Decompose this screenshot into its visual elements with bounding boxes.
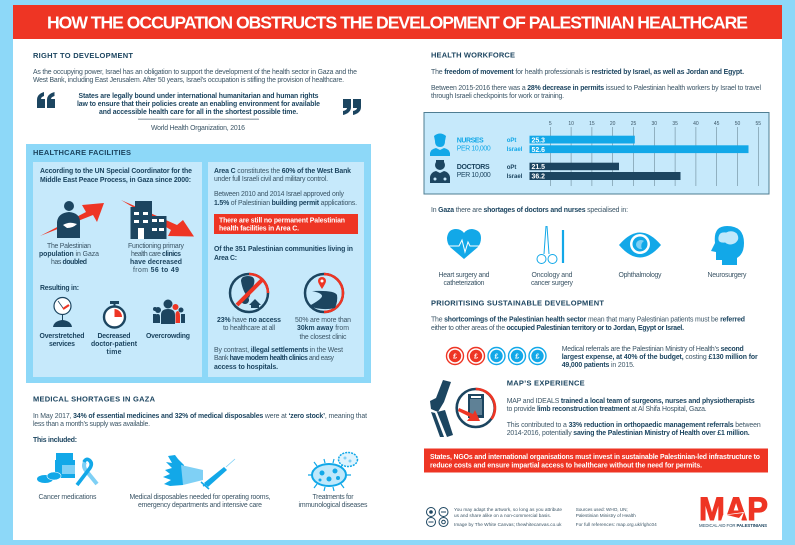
section: right to development: World Health Organization, 2016 bbox=[151, 125, 245, 132]
title banner: HOW THE OCCUPATION OBSTRUCTS THE DEVELOPMENT OF PALESTINIAN HEALTHCARE bbox=[47, 12, 748, 32]
icon: five pound coins, two red and three blue: £ bbox=[495, 354, 499, 360]
callout: call to action: reduce costs and ensure impartial access to healthcare without the need for permits. bbox=[430, 462, 702, 470]
icon: stopwatch bbox=[104, 301, 125, 328]
section: health workforce: The freedom of movement for health professionals is restricted by Israel, as well as Jordan and Egypt. bbox=[431, 69, 744, 76]
footer: licence and sources: us and share alike on a non-commercial basis. bbox=[454, 513, 551, 518]
bar chart: nurses and doctors per 10,000: Israel bbox=[507, 147, 523, 153]
icon: gloves and syringe bbox=[163, 455, 235, 489]
panel: healthcare facilities: have decreased bbox=[130, 259, 182, 266]
bar chart: nurses and doctors per 10,000: 30 bbox=[652, 121, 657, 127]
icon: five pound coins, two red and three blue bbox=[446, 348, 546, 364]
icon: five pound coins, two red and three blue: £ bbox=[536, 354, 540, 360]
footer: licence and sources: You may adapt the artwork, so long as you attribute bbox=[454, 507, 562, 512]
panel: healthcare facilities: Overcrowding bbox=[146, 333, 190, 340]
section: health workforce: HEALTH WORKFORCE bbox=[431, 50, 515, 60]
section: medical shortages in Gaza: Cancer medications bbox=[38, 494, 97, 501]
section: medical shortages in Gaza: This included: bbox=[33, 437, 77, 444]
section: right to development: States are legally bound under international humanitarian and human rights bbox=[78, 93, 319, 100]
icon: population arrow and person bbox=[40, 201, 104, 238]
callout: call to action bbox=[424, 448, 768, 472]
section: medical shortages in Gaza: less than a month’s supply was available. bbox=[33, 421, 150, 428]
panel: healthcare facilities: 1.5% of Palestinian building permit applications. bbox=[214, 200, 357, 207]
section: right to development: law to ensure that their policies create an enabling environment for available bbox=[77, 101, 320, 108]
section: right to development: As the occupying power, Israel has an obligation to support the development of the health sector in Gaza and the bbox=[33, 69, 357, 76]
panel: healthcare facilities: Area C constitutes the 60% of the West Bank bbox=[214, 168, 351, 175]
icon: pressure gauge bbox=[53, 298, 72, 327]
panel: healthcare facilities: By contrast, illegal settlements in the West bbox=[214, 347, 343, 354]
panel: healthcare facilities: According to the UN Special Coordinator for the bbox=[40, 168, 192, 175]
panel: healthcare facilities: Functioning primary bbox=[128, 243, 185, 250]
bar chart: nurses and doctors per 10,000: 15 bbox=[589, 121, 595, 127]
icon: nurse bbox=[430, 134, 450, 156]
section: health workforce: Between 2015-2016 there was a 28% decrease in permits issued to Palestinian health workers by Israel to travel bbox=[431, 85, 761, 92]
panel: healthcare facilities: has doubled bbox=[51, 259, 87, 266]
icon: crowd of people bbox=[153, 300, 185, 324]
bar chart: nurses and doctors per 10,000: 5 bbox=[549, 121, 552, 127]
section: medical shortages in Gaza: MEDICAL SHORTAGES IN GAZA bbox=[33, 394, 156, 404]
panel: healthcare facilities: to healthcare at all bbox=[223, 325, 275, 332]
section: medical shortages in Gaza: emergency departments and intensive care bbox=[138, 502, 262, 509]
section: medical shortages in Gaza bbox=[33, 394, 368, 509]
panel: healthcare facilities: Resulting in: bbox=[40, 285, 79, 292]
panel: healthcare facilities: Between 2010 and 2014 Israel approved only bbox=[214, 191, 345, 198]
panel: healthcare facilities: doctor-patient bbox=[91, 341, 138, 348]
panel: healthcare facilities: HEALTHCARE FACILITIES bbox=[33, 148, 131, 157]
panel: healthcare facilities: population in Gaza bbox=[39, 251, 99, 258]
section: prioritising sustainable development: The shortcomings of the Palestinian health sector mean that many Palestinian patients must be referred bbox=[431, 316, 745, 324]
icon: five pound coins, two red and three blue: £ bbox=[515, 354, 519, 360]
logo: Medical Aid for Palestinians: MEDICAL AID FOR PALESTINIANS bbox=[699, 523, 767, 528]
panel: healthcare facilities: 50% are more than bbox=[295, 317, 351, 324]
section: MAP's experience: MAP’S EXPERIENCE bbox=[507, 378, 585, 388]
section: prioritising sustainable development: largest expense, at 40% of the budget, costing £130 million for bbox=[562, 354, 758, 361]
section: medical shortages in Gaza: Medical disposables needed for operating rooms, bbox=[130, 494, 271, 501]
section: prioritising sustainable development: 49,000 patients in 2015. bbox=[562, 362, 635, 369]
icon: closing quote mark bbox=[343, 99, 361, 115]
section: prioritising sustainable development bbox=[431, 298, 758, 369]
icon: no access to healthcare bbox=[230, 274, 268, 312]
bars: nurses: 52.6 bbox=[532, 147, 545, 154]
icon: bacteria bbox=[308, 452, 358, 491]
icon: clipboard in circle bbox=[457, 389, 495, 427]
section: MAP's experience: to provide limb reconstruction treatment at Al Shifa Hospital, Gaza. bbox=[507, 406, 707, 413]
text: Ophthalmology bbox=[618, 272, 662, 279]
panel: healthcare facilities: 23% have no access bbox=[217, 317, 281, 324]
bar chart: nurses and doctors per 10,000: 35 bbox=[672, 121, 678, 127]
section: MAP's experience bbox=[507, 378, 761, 437]
footer: licence and sources: Sources used: WHO, UN; bbox=[576, 507, 628, 512]
icon: knee bones bbox=[430, 380, 453, 437]
footer: licence and sources: For full references: map.org.uk/rlghc04 bbox=[576, 522, 657, 527]
section: medical shortages in Gaza: Treatments for bbox=[312, 494, 354, 501]
text: cancer surgery bbox=[531, 280, 574, 287]
icon: eye bbox=[619, 232, 661, 258]
bar chart: nurses and doctors per 10,000: NURSES bbox=[457, 138, 484, 144]
bar chart: nurses and doctors per 10,000: oPt bbox=[507, 138, 516, 144]
section: health workforce: through Israeli checkpoints for work or training. bbox=[431, 93, 564, 100]
section: prioritising sustainable development: either to other areas of the occupied Palestinian territory or to Jordan, Egypt or Israel. bbox=[431, 325, 684, 332]
bars: doctors: 36.2 bbox=[532, 174, 545, 181]
panel: healthcare facilities: Area C: bbox=[214, 255, 237, 262]
panel: healthcare facilities: services bbox=[49, 341, 75, 348]
bar chart: nurses and doctors per 10,000: 55 bbox=[756, 121, 761, 127]
bar chart: nurses and doctors per 10,000: 25 bbox=[631, 121, 636, 127]
icon: doctor bbox=[430, 160, 450, 183]
section: right to development: West Bank, including East Jerusalem. After 50 years, Israel’s occupation is stifling the provision of healthcare. bbox=[33, 77, 344, 84]
section: right to development bbox=[33, 51, 361, 132]
bar chart: nurses and doctors per 10,000: PER 10,000 bbox=[457, 146, 491, 152]
icon: brain in head bbox=[711, 226, 744, 265]
text: In Gaza there are shortages of doctors and nurses specialised in: bbox=[431, 207, 628, 214]
footer: licence and sources: Palestinian Ministry of Health bbox=[576, 513, 636, 518]
bar chart: nurses and doctors per 10,000: DOCTORS bbox=[457, 164, 490, 171]
panel: healthcare facilities bbox=[26, 144, 371, 383]
icon: road to distant clinic bbox=[305, 274, 343, 312]
icon: clinic building and falling arrow bbox=[121, 200, 194, 239]
section: MAP's experience: 2014-2016, potentially saving the Palestinian Ministry of Health over £1 million. bbox=[507, 430, 750, 437]
bar chart: nurses and doctors per 10,000: 50 bbox=[735, 121, 740, 127]
icon: surgical instruments bbox=[537, 226, 563, 264]
icon: five pound coins, two red and three blue: £ bbox=[453, 354, 457, 360]
icon: heart bbox=[447, 229, 481, 259]
text: Oncology and bbox=[532, 272, 573, 279]
section: right to development: and accessible health care for all in the shortest possible time. bbox=[99, 109, 298, 116]
callout: no permanent facilities: health facilities in Area C. bbox=[219, 226, 299, 232]
section: health workforce bbox=[431, 50, 761, 100]
icon: opening quote mark bbox=[37, 92, 55, 108]
panel: healthcare facilities: The Palestinian bbox=[47, 243, 91, 250]
section: MAP's experience: MAP and IDEALS trained a local team of surgeons, nurses and physiotherapists bbox=[507, 398, 755, 405]
panel: healthcare facilities: the closest clinic bbox=[300, 334, 347, 341]
icon: cancer medication and ribbon bbox=[37, 453, 97, 485]
section: prioritising sustainable development: PRIORITISING SUSTAINABLE DEVELOPMENT bbox=[431, 298, 604, 308]
footer: licence and sources bbox=[454, 507, 657, 527]
bar chart: nurses and doctors per 10,000: oPt bbox=[507, 165, 516, 171]
callout: no permanent facilities bbox=[214, 214, 358, 234]
bars: doctors bbox=[530, 163, 680, 181]
text: Neurosurgery bbox=[708, 272, 747, 279]
panel: healthcare facilities: Decreased bbox=[98, 333, 130, 340]
panel: healthcare facilities: Middle East Peace Process, in Gaza since 2000: bbox=[40, 177, 191, 184]
section: prioritising sustainable development: Medical referrals are the Palestinian Ministry of Health’s second bbox=[562, 346, 744, 353]
section: right to development: RIGHT TO DEVELOPMENT bbox=[33, 51, 133, 60]
text: catheterization bbox=[444, 280, 485, 287]
panel: healthcare facilities: access to hospitals. bbox=[214, 364, 278, 371]
panel: healthcare facilities: 30km away from bbox=[297, 325, 349, 332]
section: MAP's experience: This contributed to a 33% reduction in orthopaedic management referrals between bbox=[507, 422, 761, 429]
panel: healthcare facilities: health care clinics bbox=[131, 251, 181, 258]
bar chart: nurses and doctors per 10,000: 20 bbox=[610, 121, 616, 127]
section: medical shortages in Gaza: In May 2017, 34% of essential medicines and 32% of medical disposables were at ‘zero stock’, meaning that bbox=[33, 413, 367, 420]
section: medical shortages in Gaza: immunological diseases bbox=[298, 502, 368, 509]
icon: five pound coins, two red and three blue: £ bbox=[474, 354, 478, 360]
bars: doctors: 21.5 bbox=[532, 164, 545, 171]
bar chart: nurses and doctors per 10,000: Israel bbox=[507, 174, 523, 180]
bar chart: nurses and doctors per 10,000: 40 bbox=[693, 121, 699, 127]
logo: Medical Aid for Palestinians: MAP bbox=[699, 491, 768, 527]
bar chart: nurses and doctors per 10,000 bbox=[424, 112, 769, 194]
bar chart: nurses and doctors per 10,000: 45 bbox=[714, 121, 720, 127]
footer: licence and sources: Image by The White Canvas; thewhitecanvas.co.uk bbox=[454, 522, 562, 527]
text: Heart surgery and bbox=[438, 272, 490, 279]
panel: healthcare facilities: Overstretched bbox=[40, 333, 84, 340]
callout: no permanent facilities: There are still no permanent Palestinian bbox=[219, 218, 345, 224]
bars: nurses: 25.3 bbox=[532, 137, 545, 144]
panel: healthcare facilities: from 56 to 49 bbox=[133, 267, 179, 274]
panel: healthcare facilities: Bank have modern health clinics and easy bbox=[214, 355, 335, 362]
bar chart: nurses and doctors per 10,000: PER 10,000 bbox=[457, 172, 491, 179]
title banner bbox=[13, 5, 782, 39]
bars: nurses bbox=[530, 136, 748, 154]
panel: healthcare facilities: Of the 351 Palestinian communities living in bbox=[214, 246, 353, 253]
panel: healthcare facilities: under full Israeli civil and military control. bbox=[214, 176, 328, 183]
bar chart: nurses and doctors per 10,000: 10 bbox=[568, 121, 574, 127]
panel: healthcare facilities: time bbox=[106, 349, 122, 356]
callout: call to action: States, NGOs and international organisations must invest in sustainable Palestinian-led infrastructure to bbox=[430, 454, 760, 461]
icon: creative commons badges bbox=[426, 508, 448, 526]
